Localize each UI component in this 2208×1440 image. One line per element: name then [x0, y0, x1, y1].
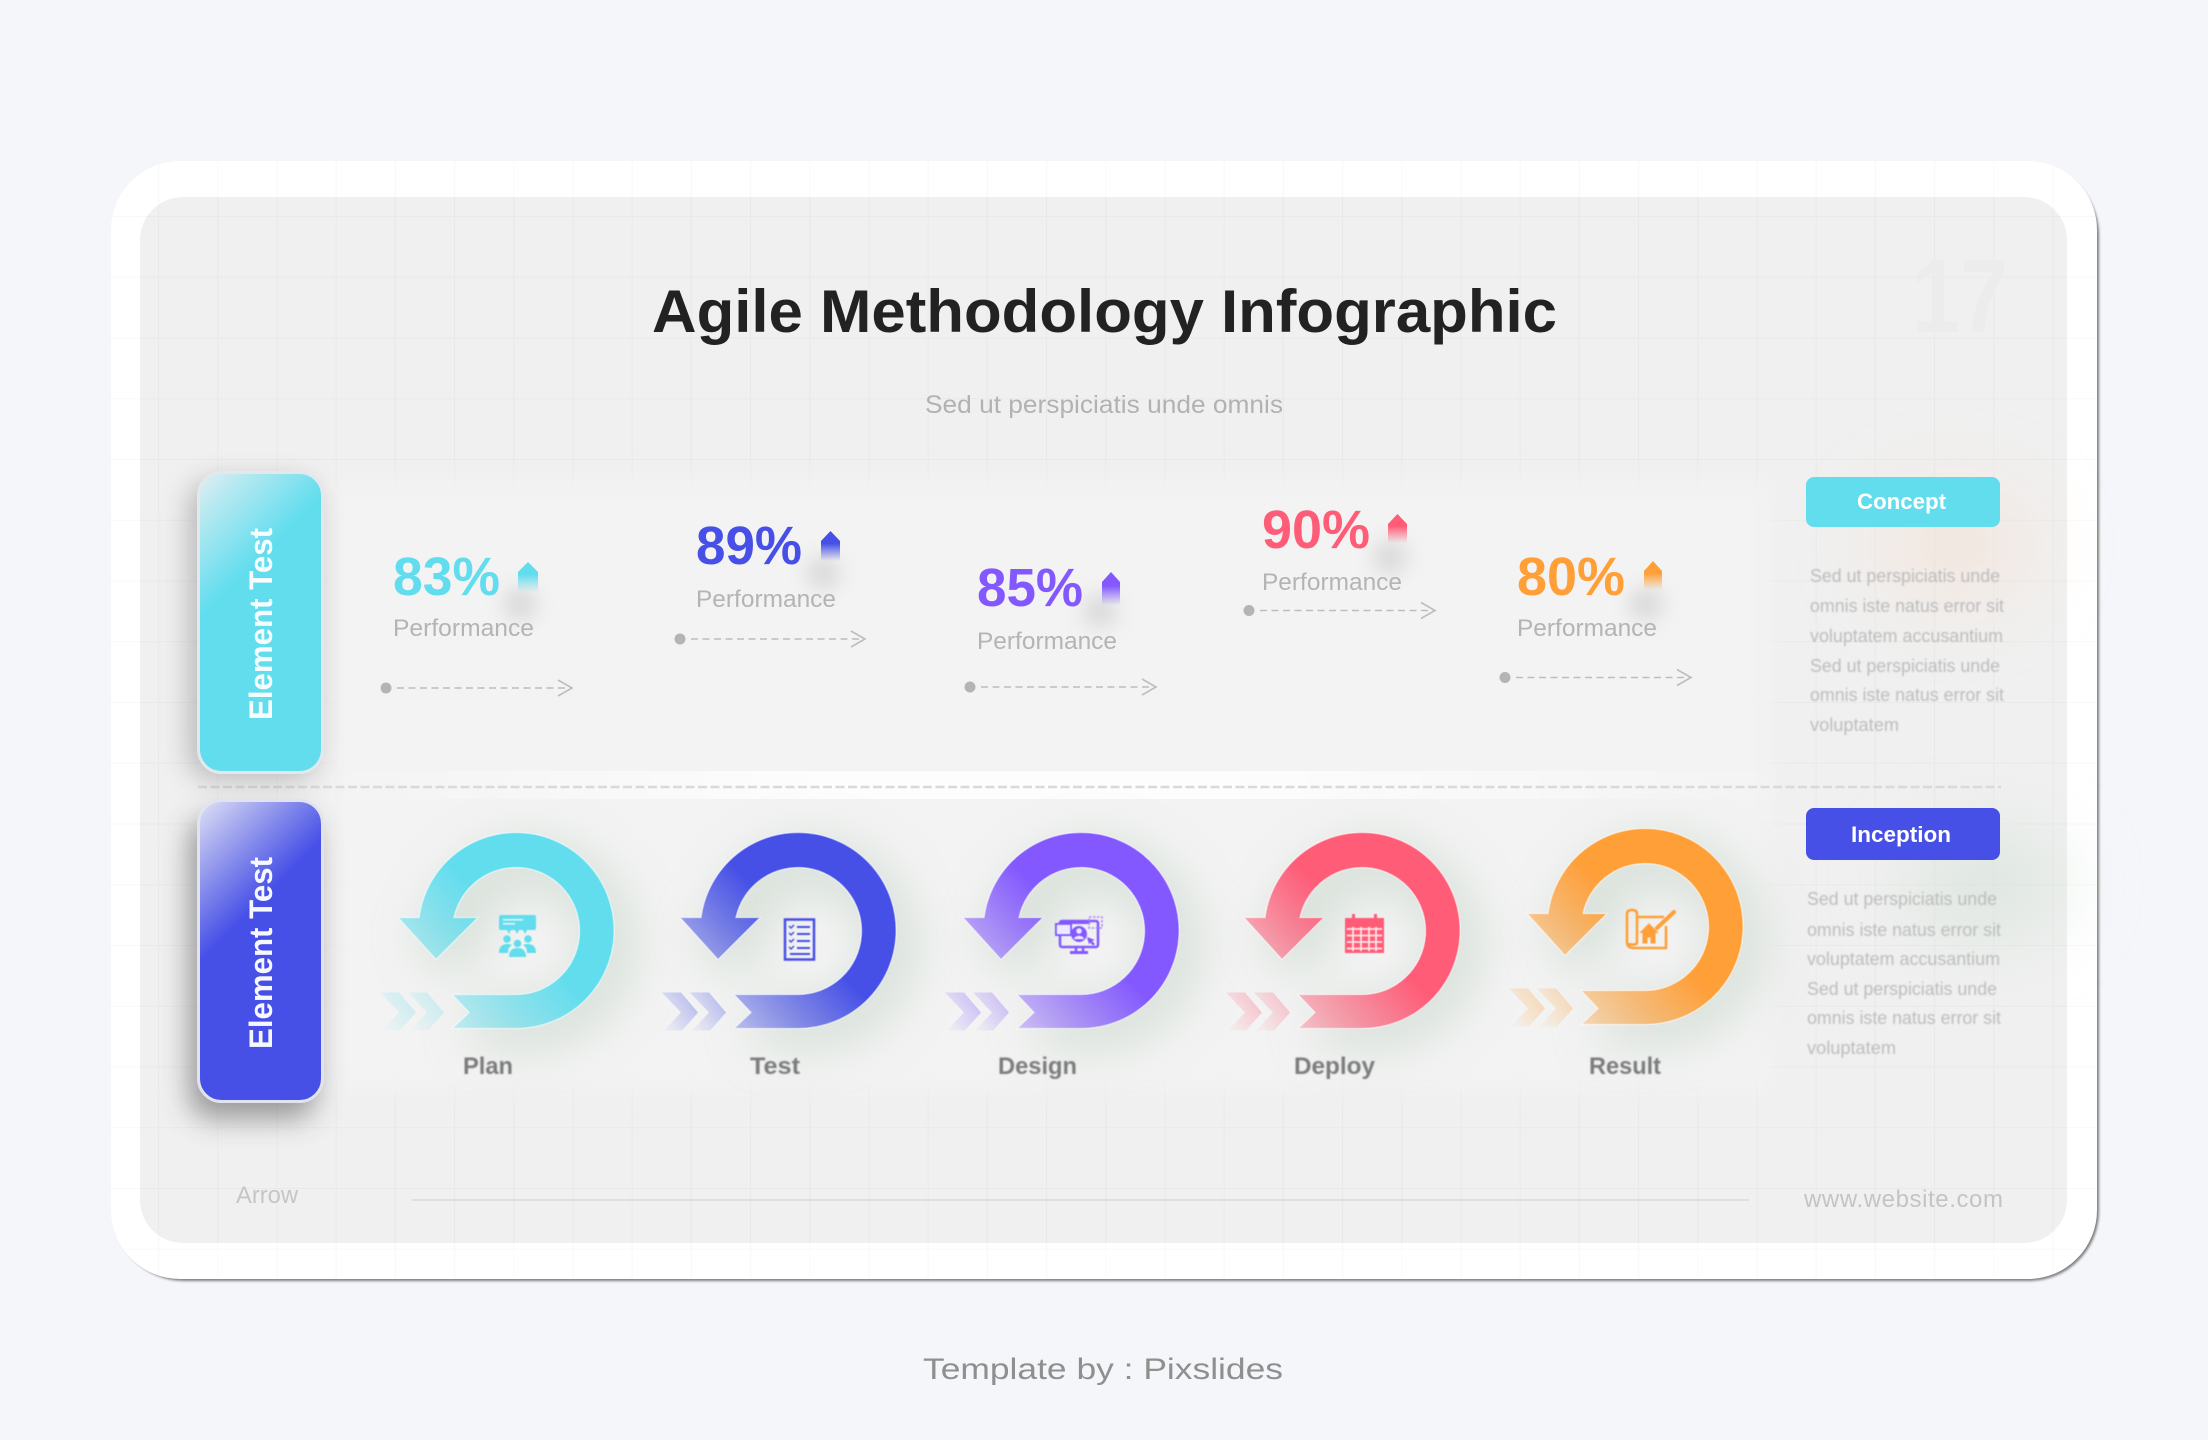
metric: 80%: 80% — [1517, 547, 1625, 607]
metric: 89%: 89% — [696, 516, 802, 576]
text block: Inception description: voluptatem accusantium — [1807, 949, 2000, 969]
button: Concept: Concept — [1857, 489, 1947, 514]
button: Inception: Inception — [1851, 822, 1951, 847]
credit line: Template by : Pixslides — [923, 1353, 1283, 1386]
chevrons — [380, 992, 444, 1030]
title: Agile Methodology Infographic — [652, 278, 1557, 345]
text block: Inception description — [1807, 889, 2001, 1058]
ring shadow — [977, 846, 1193, 1042]
text block: Inception description: Sed ut perspiciatis unde — [1807, 889, 1997, 909]
text block: Concept description: omnis iste natus error sit — [1810, 596, 2004, 616]
label: Plan: Plan — [463, 1053, 513, 1080]
chevrons — [1509, 988, 1573, 1026]
icon: team with speech bubble — [499, 915, 536, 957]
metric: 80%: Performance — [1517, 615, 1657, 642]
metric: 85% — [964, 558, 1156, 695]
label: Test: Test — [750, 1053, 800, 1080]
text block: Concept description — [1810, 566, 2004, 735]
divider band — [320, 771, 1800, 799]
cycle: Design — [945, 833, 1193, 1042]
ring shadow — [1541, 842, 1757, 1038]
icon: calendar — [1345, 914, 1384, 953]
metric: 80% — [1500, 547, 1691, 686]
subtitle: Sed ut perspiciatis unde omnis — [925, 391, 1283, 419]
row label: Element Test top — [189, 472, 322, 779]
ring shadow — [1258, 846, 1474, 1042]
ring shadow — [412, 846, 628, 1042]
page number: 17 — [1912, 239, 2008, 355]
arrow ring — [398, 833, 614, 1029]
row label: Element Test bottom: Element Test — [243, 857, 279, 1049]
slide card — [111, 161, 2099, 1281]
cycle: Plan — [380, 833, 628, 1042]
cycle: Test — [662, 833, 910, 1042]
icon: checklist — [785, 920, 814, 960]
text block: Concept description: voluptatem accusantium — [1810, 626, 2003, 646]
ring shadow — [694, 846, 910, 1042]
chevrons — [1226, 992, 1290, 1030]
text block: Concept description: omnis iste natus error sit — [1810, 685, 2004, 705]
text block: Concept description: Sed ut perspiciatis unde — [1810, 656, 2000, 676]
footer label: Arrow: Arrow — [236, 1182, 299, 1209]
divider line — [198, 786, 2001, 788]
text block: Inception description: omnis iste natus error sit — [1807, 920, 2001, 940]
text block: Inception description: voluptatem — [1807, 1038, 1896, 1058]
row label: Element Test bottom — [189, 800, 322, 1119]
button: Inception — [1806, 808, 2000, 860]
cycle: Result — [1509, 829, 1757, 1038]
icon: monitor with user — [1056, 917, 1102, 954]
chevrons — [945, 992, 1009, 1030]
metric: 90% — [1244, 500, 1435, 618]
text block: Concept description: Sed ut perspiciatis unde — [1810, 566, 2000, 586]
metric: 83%: Performance — [393, 615, 534, 642]
label: Deploy: Deploy — [1294, 1053, 1376, 1080]
cycle: Deploy — [1226, 833, 1474, 1042]
metric: 83% — [380, 547, 572, 696]
metric: 90%: 90% — [1262, 500, 1370, 560]
chevrons — [662, 992, 726, 1030]
arrow ring — [1527, 829, 1743, 1025]
metric: 89% — [674, 516, 865, 647]
footer website: www.website.com — [1803, 1186, 2003, 1213]
text block: Inception description: omnis iste natus error sit — [1807, 1008, 2001, 1028]
label: Design: Design — [998, 1053, 1077, 1080]
arrow ring — [963, 833, 1179, 1029]
icon: blueprint house — [1627, 910, 1674, 948]
metric: 85%: 85% — [977, 558, 1083, 618]
arrow ring — [1244, 833, 1460, 1029]
metric: 90%: Performance — [1262, 569, 1402, 596]
text block: Concept description: voluptatem — [1810, 715, 1899, 735]
metric: 89%: Performance — [696, 586, 836, 613]
metric: 83%: 83% — [393, 547, 500, 607]
metric: 85%: Performance — [977, 628, 1117, 655]
button: Concept — [1806, 477, 2000, 527]
row label: Element Test top: Element Test — [243, 528, 279, 720]
footer rule — [412, 1199, 1749, 1201]
text block: Inception description: Sed ut perspiciatis unde — [1807, 979, 1997, 999]
label: Result: Result — [1589, 1053, 1661, 1080]
arrow ring — [680, 833, 896, 1029]
